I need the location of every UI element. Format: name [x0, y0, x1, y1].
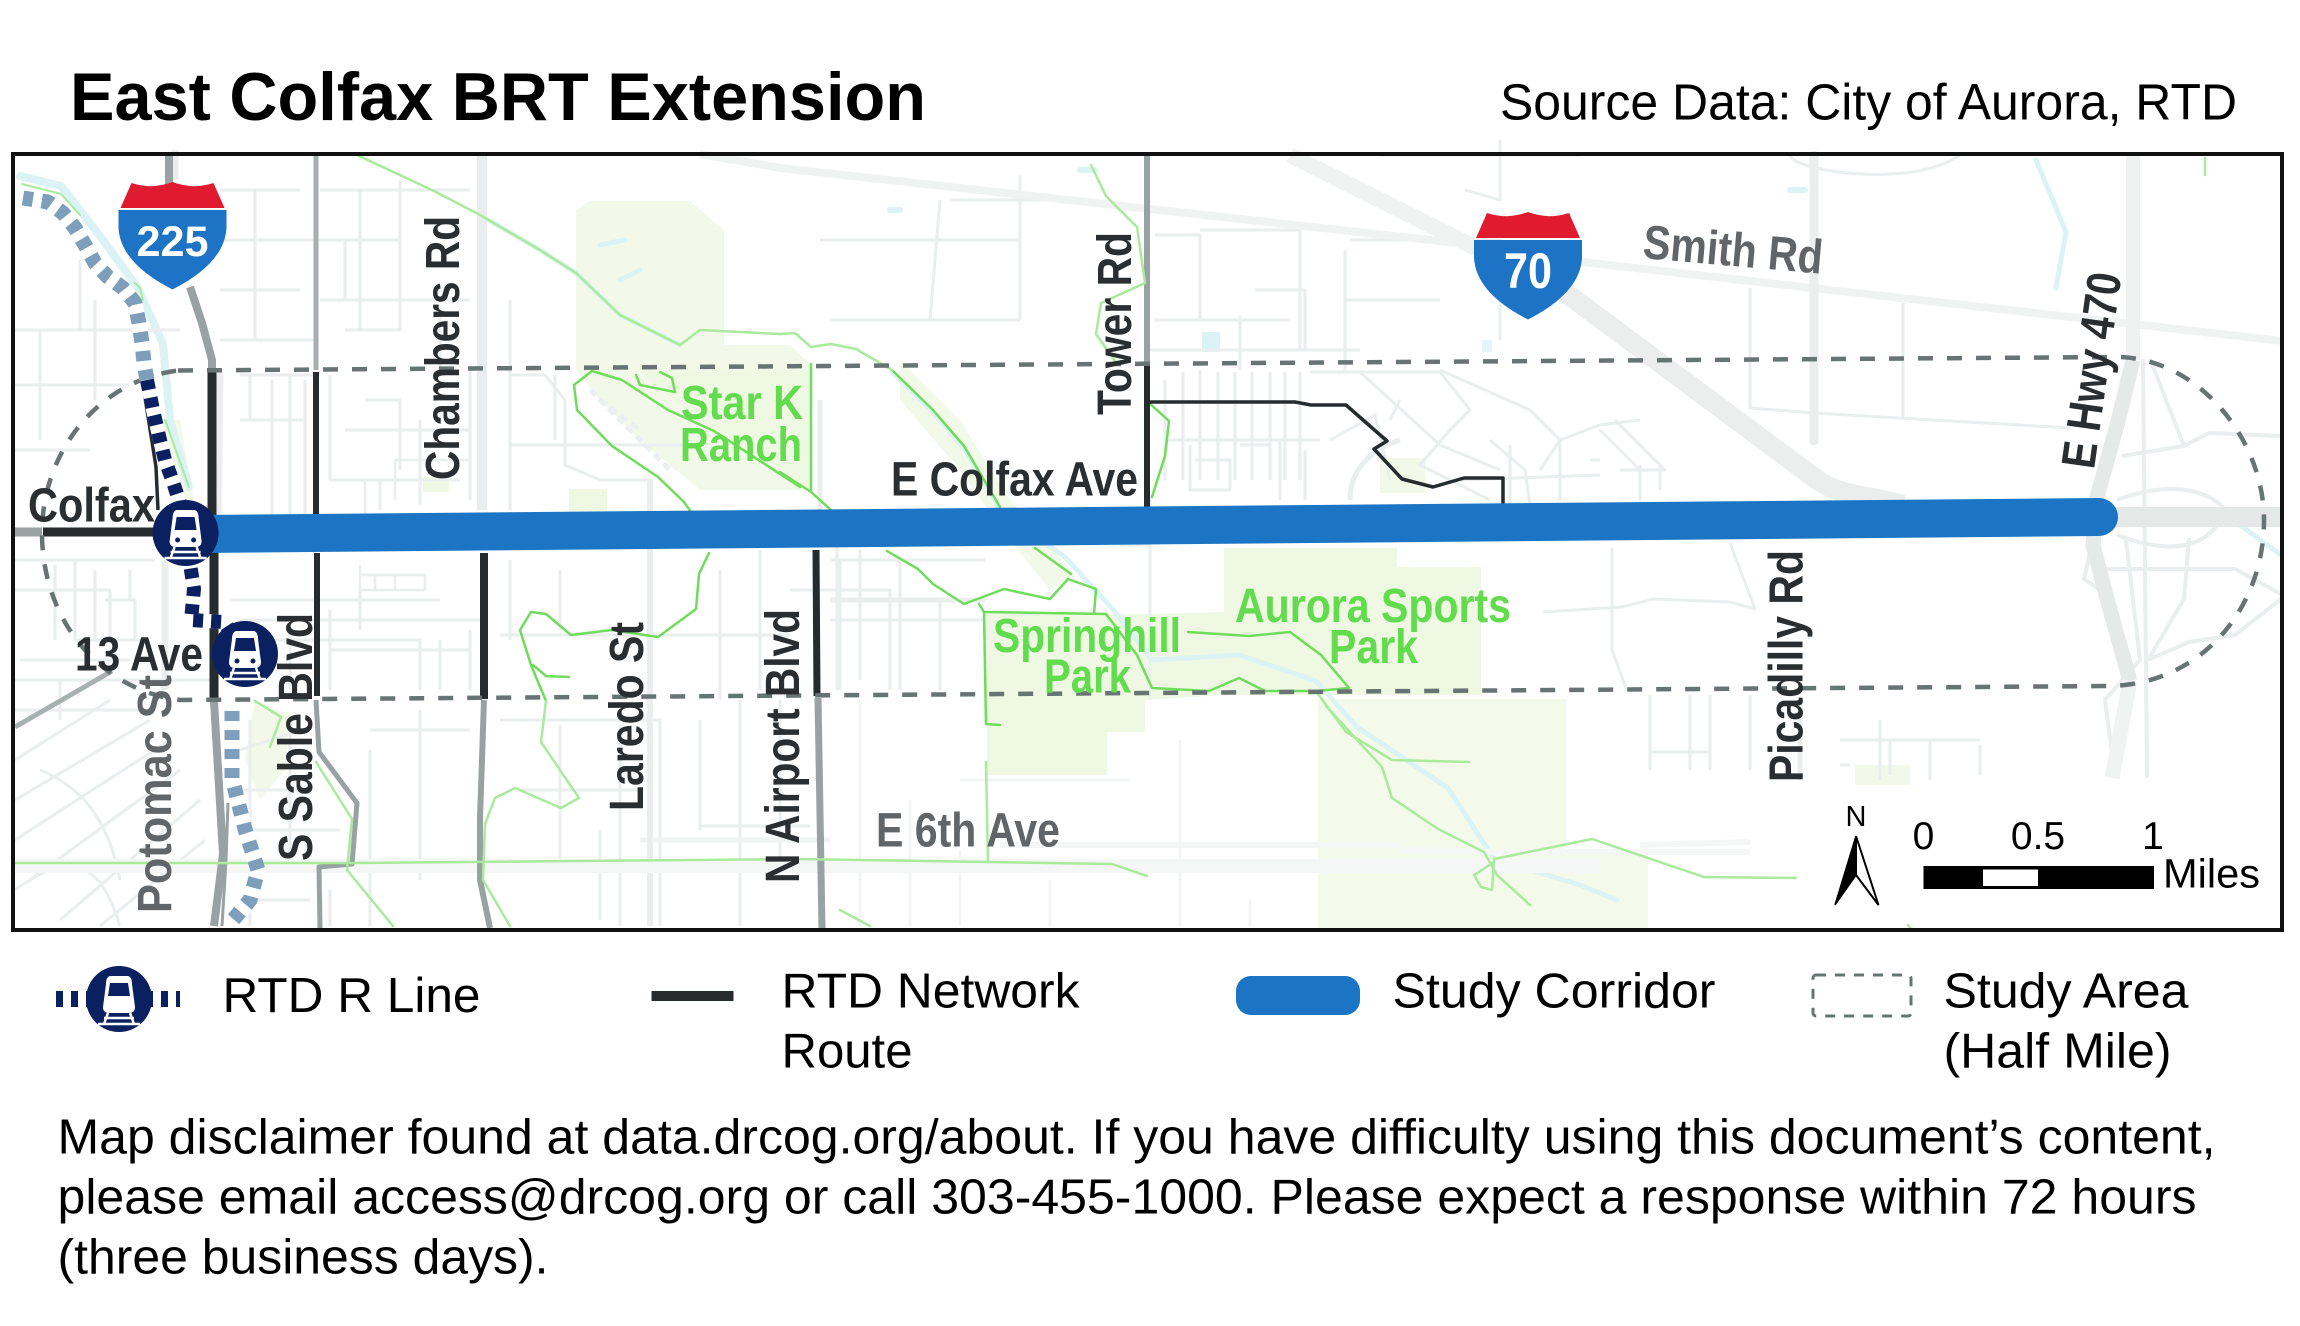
disclaimer text: please email access@drcog.org or call 303-455-1000. Please expect a response within 72 hours: [58, 1170, 2196, 1224]
icon: I-225 shield: [118, 182, 226, 290]
road and place labels: Park: [1329, 621, 1418, 674]
road and place labels: Picadilly Rd: [1760, 550, 1814, 782]
station: 13 Ave: [212, 621, 278, 687]
study corridor: [200, 498, 2118, 553]
station: Colfax: [153, 500, 219, 566]
RTD network routes: [43, 364, 1503, 700]
legend item: RTD Network Route: Route: [782, 1024, 912, 1078]
source note: Source Data: City of Aurora, RTD: [1500, 74, 2237, 130]
icon: I-70 shield: [1474, 212, 1582, 320]
road and place labels: Smith Rd: [1641, 216, 1825, 285]
legend item: Study Area: Study Area: [1944, 964, 2189, 1018]
study area boundary: [42, 357, 2264, 700]
disclaimer text: Map disclaimer found at data.drcog.org/about. If you have difficulty using this document’s content,: [58, 1110, 2216, 1164]
icon: I-70 shield: 70: [1504, 243, 1552, 299]
parks: [150, 201, 1910, 928]
road and place labels: N Airport Blvd: [757, 609, 810, 883]
road and place labels: Potomac St: [129, 675, 182, 913]
legend item: Study Corridor: Study Corridor: [1392, 964, 1716, 1018]
light trails: [15, 155, 2205, 930]
road and place labels: 13 Ave: [75, 628, 203, 682]
map frame: [13, 154, 2282, 930]
legend item: RTD Network Route: [652, 964, 1080, 1078]
panel: map: [12, 140, 2283, 930]
scale bar: 0.5: [2011, 815, 2065, 858]
legend item: Study Corridor: [1236, 964, 1716, 1018]
road and place labels: Star K: [681, 377, 803, 430]
road and place labels: Springhill: [993, 610, 1181, 663]
legend item: RTD Network Route: RTD Network: [782, 964, 1080, 1018]
legend: [56, 964, 2189, 1078]
light highways: [15, 150, 2283, 926]
road and place labels: E 6th Ave: [876, 804, 1060, 858]
RTD R Line: [23, 198, 258, 921]
road and place labels: E Hwy 470: [2052, 269, 2132, 472]
road and place labels: Aurora Sports: [1235, 580, 1511, 633]
scale bar: Miles: [2163, 850, 2260, 896]
scale bar: 0: [1913, 815, 1934, 858]
minor roads: [15, 140, 2281, 926]
legend item: Study Area: (Half Mile): [1944, 1024, 2172, 1078]
scale bar: 1: [2142, 815, 2164, 858]
disclaimer text: (three business days).: [58, 1230, 548, 1284]
major roads: [12, 154, 1147, 928]
road and place labels: Ranch: [680, 419, 802, 472]
scale bar: [1913, 815, 2260, 896]
legend item: RTD R Line: RTD R Line: [222, 969, 480, 1023]
icon: I-225 shield: 225: [136, 218, 208, 266]
legend item: Study Area: [1813, 964, 2189, 1078]
water: [20, 160, 2281, 900]
title: East Colfax BRT Extension: [70, 59, 926, 135]
trails: [520, 364, 1349, 725]
disclaimer text: [58, 1110, 2216, 1284]
icon: north arrow: N: [1846, 801, 1866, 833]
road and place labels: Tower Rd: [1089, 232, 1142, 415]
road and place labels: E Colfax Ave: [891, 454, 1138, 506]
icon: north arrow: [1835, 801, 1878, 905]
road and place labels: Colfax: [28, 480, 155, 532]
road and place labels: Laredo St: [601, 622, 654, 811]
road and place labels: Chambers Rd: [417, 216, 470, 480]
legend item: RTD R Line: [56, 966, 480, 1032]
road and place labels: [28, 216, 2132, 913]
road and place labels: Park: [1044, 650, 1131, 704]
road and place labels: S Sable Blvd: [270, 613, 323, 861]
